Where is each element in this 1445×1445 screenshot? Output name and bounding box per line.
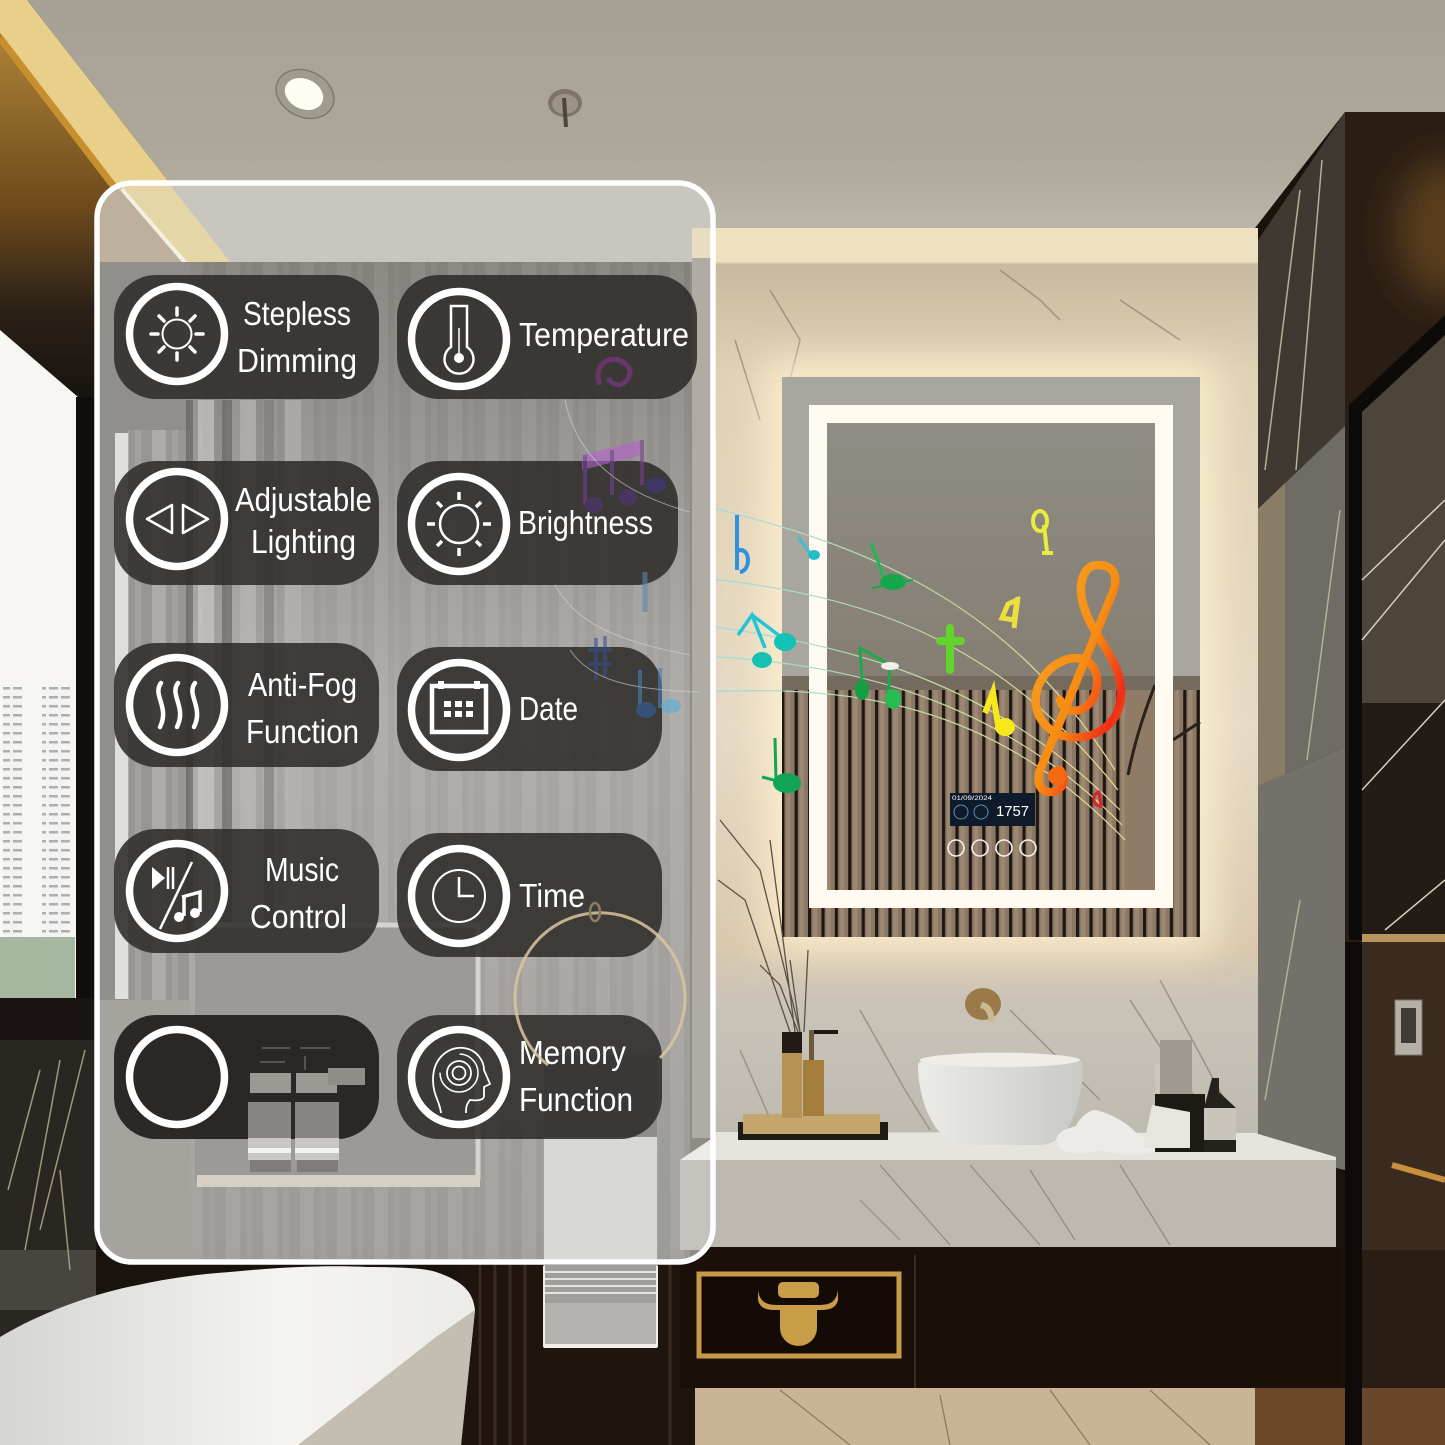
pill: Date: Date xyxy=(519,690,578,727)
shelf niche xyxy=(195,925,480,1187)
mirror xyxy=(782,377,1200,937)
soap dispensers and tray xyxy=(738,1030,888,1140)
pill: Memory Function: Memory xyxy=(519,1034,626,1071)
pill: Memory Function xyxy=(397,1015,662,1139)
pill: Time: Time xyxy=(519,877,585,914)
clock display on mirror xyxy=(950,793,1035,826)
ceiling sprinkler xyxy=(548,89,582,127)
music staff lines xyxy=(660,500,1125,840)
pill: Music Control: Control xyxy=(250,898,347,935)
pill: Date xyxy=(397,647,662,771)
pill: Adjustable Lighting xyxy=(114,461,379,585)
pill: Stepless Dimming: Stepless xyxy=(243,295,351,332)
folded towels xyxy=(1056,1110,1158,1154)
toiletry bottles xyxy=(1143,1040,1236,1152)
music notes on mirror xyxy=(737,511,1101,806)
treble clef xyxy=(1036,565,1121,792)
touch buttons on mirror xyxy=(948,840,1036,856)
pill: Anti-Fog Function: Function xyxy=(246,713,359,750)
pill: Anti-Fog Function xyxy=(114,643,379,767)
pill: Brightness xyxy=(397,461,678,585)
bathtub xyxy=(0,1266,475,1445)
towel xyxy=(544,1117,657,1260)
pill: Time xyxy=(397,833,662,957)
wall: right dark panels and marble xyxy=(1258,112,1445,1445)
mirror glow xyxy=(765,362,1215,952)
countertop and vanity xyxy=(680,1132,1345,1445)
pill: Memory Function: Function xyxy=(519,1081,633,1118)
pill: Temperature xyxy=(397,275,697,399)
clock display on mirror: 01/09/2024 xyxy=(952,796,993,802)
wall: marble behind mirror xyxy=(690,228,1258,1138)
pill: Stepless Dimming: Dimming xyxy=(237,342,357,379)
pill: blank function xyxy=(114,1015,379,1139)
pill: Music Control: Music xyxy=(265,851,339,888)
pill: Brightness: Brightness xyxy=(518,504,653,541)
sink xyxy=(918,1052,1083,1145)
pill: Anti-Fog Function: Anti-Fog xyxy=(248,666,357,703)
recessed ceiling light xyxy=(268,60,342,128)
panel outline xyxy=(97,183,713,1262)
panel backdrop xyxy=(96,182,714,1262)
pill: Adjustable Lighting: Lighting xyxy=(251,523,356,560)
faded notes drifting over the panel xyxy=(555,359,700,718)
pill: Adjustable Lighting: Adjustable xyxy=(235,481,372,518)
dry reeds xyxy=(718,820,808,1032)
faucet xyxy=(965,988,1001,1022)
stored toiletries behind the panel xyxy=(248,1048,365,1172)
pill: Music Control xyxy=(114,829,379,953)
pill: Temperature: Temperature xyxy=(519,316,689,353)
clock display on mirror: 1757 xyxy=(996,803,1029,820)
towel ring xyxy=(515,903,685,1065)
hanging towel bottom xyxy=(543,1265,658,1348)
pill: Stepless Dimming xyxy=(114,275,379,399)
